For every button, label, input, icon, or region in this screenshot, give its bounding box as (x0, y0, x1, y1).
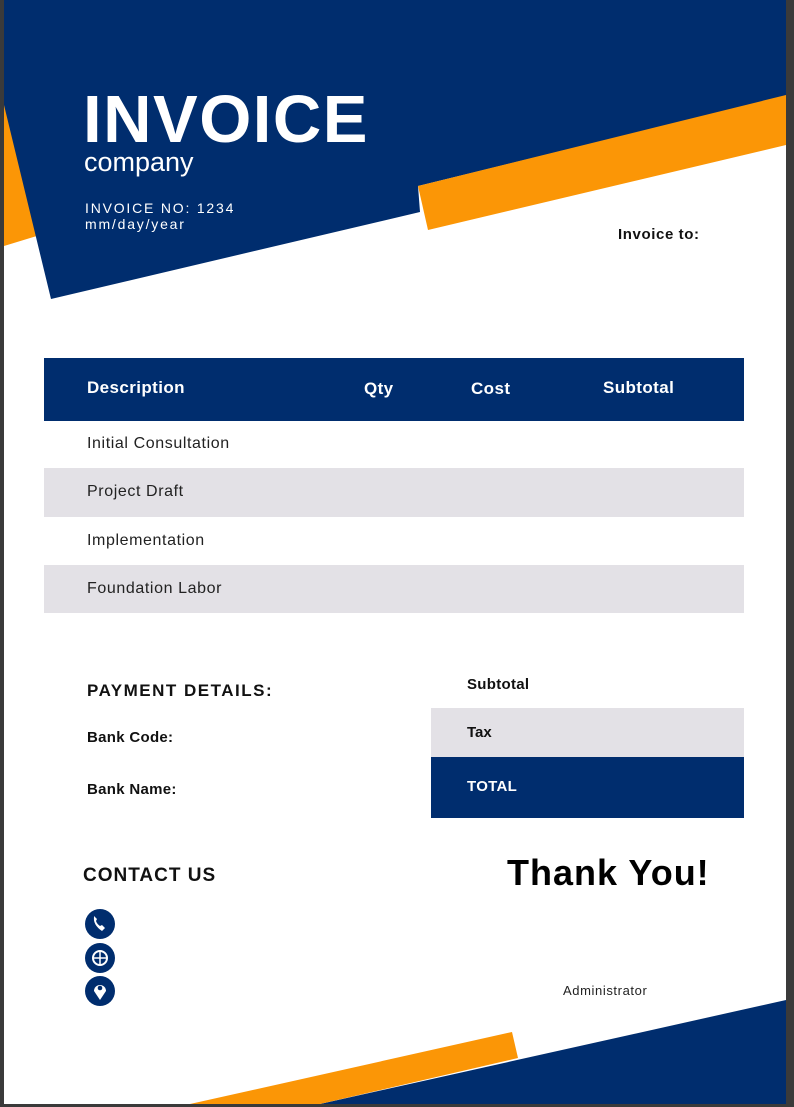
payment details: PAYMENT DETAILS: (87, 681, 273, 700)
title: INVOICE (83, 82, 369, 157)
row: Foundation Labor: Foundation Labor (87, 580, 222, 597)
administrator signature label: Administrator (563, 983, 647, 998)
icon: location pin (85, 976, 115, 1006)
icon: globe (85, 943, 115, 973)
row: Foundation Labor (44, 565, 744, 613)
table header: Cost (471, 379, 510, 398)
totals block: Tax (467, 724, 492, 741)
totals block (431, 676, 744, 818)
table header: Subtotal (603, 378, 674, 397)
payment details (87, 681, 273, 798)
table (44, 358, 744, 613)
contact us heading: CONTACT US (83, 865, 216, 886)
table header: Description (87, 378, 185, 397)
invoice number and date (85, 200, 235, 232)
table header (44, 358, 744, 421)
row: Project Draft: Project Draft (87, 483, 184, 500)
totals block: Subtotal (467, 676, 529, 693)
icon: phone (85, 909, 115, 939)
invoice to label: Invoice to: (618, 226, 700, 243)
thank you: Thank You! (507, 852, 710, 893)
totals block: TOTAL (467, 778, 517, 795)
contact icons (85, 909, 115, 1006)
payment details: Bank Name: (87, 781, 177, 798)
invoice number and date: mm/day/year (85, 216, 186, 232)
table header: Qty (364, 379, 394, 398)
row: Implementation: Implementation (87, 532, 205, 549)
row: Initial Consultation: Initial Consultation (87, 435, 230, 452)
payment details: Bank Code: (87, 729, 173, 746)
subtitle: company: company (84, 147, 194, 177)
row: Project Draft (44, 468, 744, 517)
invoice number and date: INVOICE NO: 1234 (85, 200, 235, 216)
